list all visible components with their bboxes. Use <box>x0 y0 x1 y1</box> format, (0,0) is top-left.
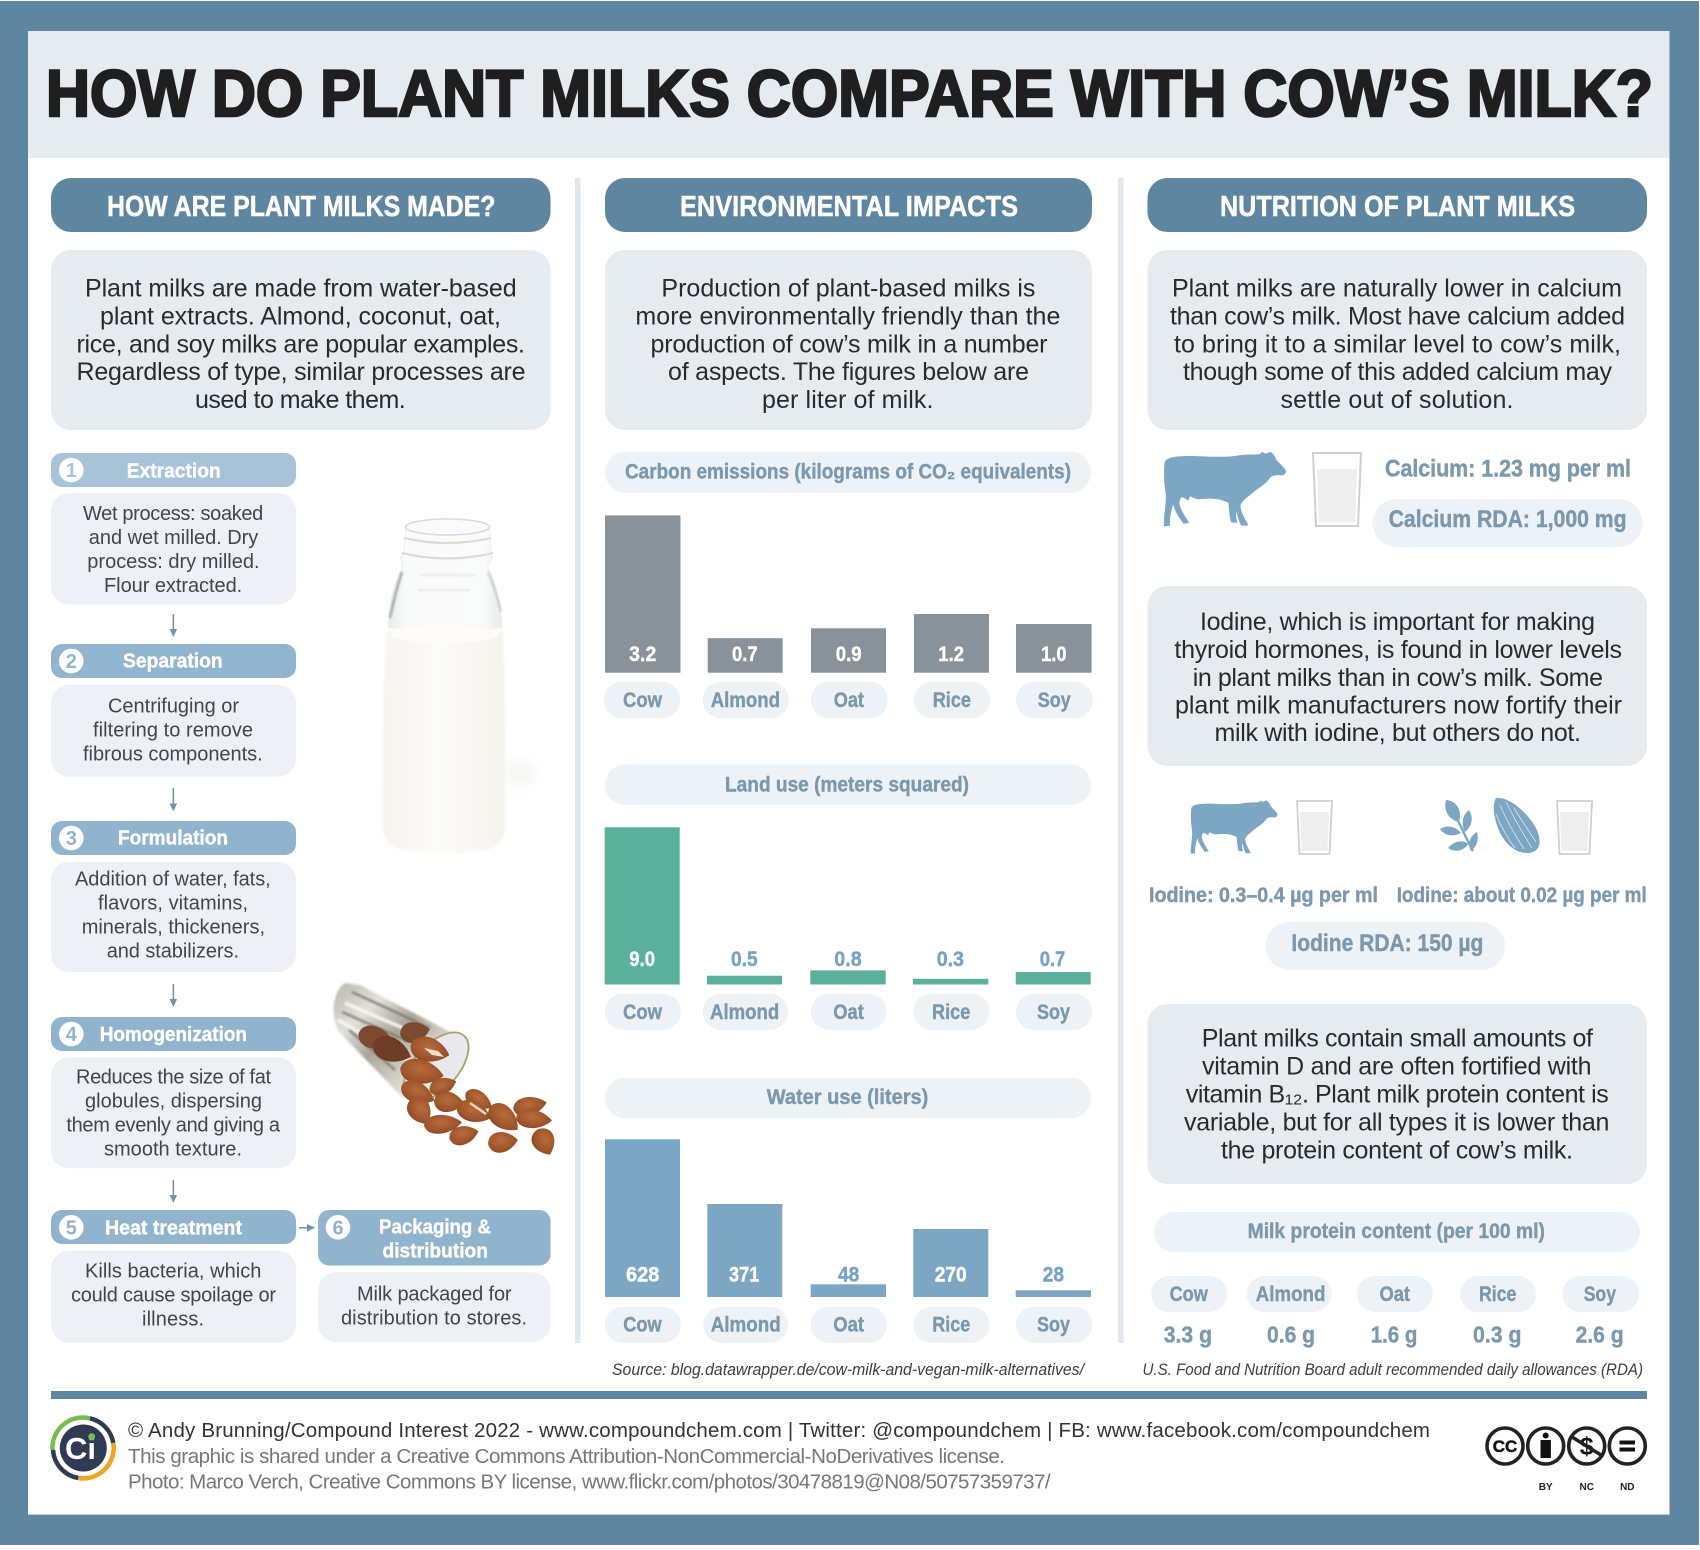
bar chart: land use <box>605 764 1092 1030</box>
text block: vitamins and protein: Plant milks contain small amounts of <box>1202 1025 1593 1053</box>
bar chart: water use: Almond <box>711 1313 781 1336</box>
text block: iodine <box>1148 586 1647 766</box>
bar chart: water use: Oat <box>833 1313 864 1336</box>
icon: creative commons badges <box>1487 1428 1645 1493</box>
text block: environmental intro: more environmentally friendly than the <box>635 302 1060 330</box>
text block: environmental intro: production of cow’s milk in a number <box>650 330 1048 358</box>
heading: how are plant milks made <box>51 178 550 232</box>
step 6: packaging and distribution: distribution <box>382 1239 488 1262</box>
bar chart: water use: 270 <box>935 1263 967 1286</box>
table: milk protein content: Milk protein content (per 100 ml) <box>1248 1220 1545 1243</box>
text block: vitamins and protein: vitamin D and are often fortified with <box>1202 1053 1592 1081</box>
step 3: formulation <box>51 821 296 972</box>
bar chart: water use: Cow <box>623 1313 662 1336</box>
arrow: step 2 to 3 <box>170 788 177 812</box>
table: milk protein content: Oat <box>1380 1283 1410 1306</box>
table: milk protein content: 0.6 g <box>1267 1322 1315 1348</box>
icon: creative commons badges: $ <box>1580 1432 1594 1460</box>
text block: plant milks intro: plant extracts. Almond, coconut, oat, <box>100 302 501 330</box>
heading: nutrition of plant milks <box>1148 178 1647 232</box>
step 2: separation: Separation <box>123 649 223 672</box>
arrow: step 5 to 6 <box>299 1224 315 1232</box>
step 4: homogenization: Homogenization <box>100 1023 247 1046</box>
step 3: formulation: minerals, thickeners, <box>82 917 265 939</box>
bar chart: carbon emissions: Carbon emissions (kilograms of CO₂ equivalents) <box>625 460 1071 484</box>
step 6: packaging and distribution: Packaging & <box>379 1215 491 1238</box>
bar chart: water use: 628 <box>626 1263 660 1286</box>
bar chart: carbon emissions: Rice <box>933 689 971 712</box>
photo: milk bottle <box>382 519 536 854</box>
table: milk protein content: 1.6 g <box>1371 1322 1417 1348</box>
step 1: extraction: Extraction <box>127 460 221 483</box>
bar chart: land use: 0.8 <box>834 948 862 971</box>
step 2: separation: fibrous components. <box>83 744 263 766</box>
calcium RDA pill: Calcium RDA: 1,000 mg <box>1389 506 1627 533</box>
text block: iodine: Iodine, which is important for making <box>1200 608 1595 636</box>
text block: calcium: than cow’s milk. Most have calcium added <box>1170 302 1625 330</box>
bar chart: land use: Oat <box>833 1001 864 1024</box>
step 3: formulation: 3 <box>66 828 77 850</box>
text block: plant milks intro: Plant milks are made from water-based <box>85 274 517 302</box>
logo: compound interest: Ci <box>65 1431 96 1466</box>
icon: creative commons badges: ND <box>1620 1482 1635 1493</box>
step 6: packaging and distribution: 6 <box>332 1217 344 1239</box>
text block: iodine: plant milk manufacturers now fortify their <box>1175 692 1622 720</box>
step 5: heat treatment: Kills bacteria, which <box>85 1260 261 1282</box>
bar chart: land use: Land use (meters squared) <box>725 773 969 796</box>
iodine RDA pill <box>1266 922 1505 970</box>
step 3: formulation: and stabilizers. <box>107 940 239 962</box>
bar chart: carbon emissions: 0.7 <box>732 643 758 666</box>
table: milk protein content: 2.6 g <box>1576 1322 1624 1348</box>
step 3: formulation: Formulation <box>118 826 228 849</box>
text block: plant milks intro: used to make them. <box>195 386 406 414</box>
step 3: formulation: Addition of water, fats, <box>75 869 271 891</box>
bar chart: carbon emissions: 3.2 <box>629 643 656 666</box>
iodine value: cow's milk: Iodine: 0.3–0.4 µg per ml <box>1149 884 1378 907</box>
heading: environmental impacts <box>605 178 1092 232</box>
panel: environmental impacts <box>604 178 1093 1379</box>
bar chart: land use: 0.5 <box>731 948 758 971</box>
step 5: heat treatment: illness. <box>142 1308 204 1330</box>
text block: iodine: thyroid hormones, is found in lower levels <box>1174 636 1622 664</box>
bar chart: carbon emissions <box>604 452 1093 718</box>
table: milk protein content: Soy <box>1584 1283 1616 1306</box>
iodine value: plant milk: Iodine: about 0.02 µg per ml <box>1397 884 1647 907</box>
bar chart: land use: Rice <box>932 1001 970 1024</box>
icon: plant sprig <box>1440 800 1478 851</box>
step 5: heat treatment: 5 <box>66 1217 77 1239</box>
table: milk protein content: Rice <box>1479 1283 1516 1306</box>
text block: calcium: though some of this added calcium may <box>1183 358 1612 386</box>
icon: glass of milk large <box>1313 453 1361 526</box>
arrow: step 4 to 5 <box>170 1180 177 1203</box>
footer credits: © Andy Brunning/Compound Interest 2022 - www.compoundchem.com | Twitter: @compoundchem | FB: www.facebook.com/compoundchem <box>128 1419 1430 1442</box>
icon: creative commons badges: CC <box>1493 1437 1517 1456</box>
bar chart: land use: Soy <box>1037 1001 1070 1024</box>
step 1: extraction: Wet process: soaked <box>83 503 263 525</box>
step 5: heat treatment: could cause spoilage or <box>71 1285 276 1307</box>
title <box>28 31 1670 158</box>
step 1: extraction: Flour extracted. <box>104 575 242 597</box>
text block: vitamins and protein: the protein content of cow’s milk. <box>1221 1137 1573 1165</box>
step 4: homogenization: Reduces the size of fat <box>76 1066 271 1088</box>
step 4: homogenization: them evenly and giving a <box>66 1115 281 1137</box>
text block: vitamins and protein: variable, but for all types it is lower than <box>1184 1109 1609 1137</box>
panel: nutrition of plant milks <box>1142 178 1647 1379</box>
text block: calcium: Plant milks are naturally lower in calcium <box>1172 274 1622 302</box>
text block: iodine: in plant milks than in cow’s milk. Some <box>1193 664 1603 692</box>
photo: glass tube of almonds <box>334 983 560 1159</box>
table: milk protein content <box>1151 1212 1640 1348</box>
text block: vitamins and protein: vitamin B₁₂. Plant milk protein content is <box>1186 1081 1609 1109</box>
arrow: step 3 to 4 <box>170 984 177 1007</box>
calcium RDA pill <box>1373 499 1643 547</box>
bar chart: land use: 0.7 <box>1040 948 1065 971</box>
bar chart: water use: 371 <box>729 1263 760 1286</box>
icon: cow large <box>1164 452 1286 526</box>
icon: almond <box>1494 798 1540 853</box>
text block: vitamins and protein <box>1148 1004 1647 1184</box>
text block: plant milks intro: Regardless of type, similar processes are <box>76 358 526 386</box>
table: milk protein content: 3.3 g <box>1164 1322 1212 1348</box>
step 2: separation <box>51 644 296 777</box>
step 5: heat treatment: Heat treatment <box>105 1217 242 1240</box>
table: milk protein content: 0.3 g <box>1473 1322 1522 1348</box>
step 1: extraction: 1 <box>66 460 77 482</box>
almonds <box>356 1019 560 1159</box>
text block: environmental intro: of aspects. The figures below are <box>668 358 1029 386</box>
text block: plant milks intro: rice, and soy milks are popular examples. <box>76 330 525 358</box>
footer credits: This graphic is shared under a Creative Commons Attribution-NonCommercial-NoDerivatives license. <box>128 1445 1005 1468</box>
bar chart: water use: Rice <box>932 1313 970 1336</box>
step 1: extraction: process: dry milled. <box>87 551 260 573</box>
text block: environmental intro: Production of plant-based milks is <box>661 274 1035 302</box>
text block: environmental intro <box>605 250 1092 430</box>
text block: plant milks intro <box>51 250 550 430</box>
column dividers <box>575 178 1124 1343</box>
step 3: formulation: flavors, vitamins, <box>98 893 248 915</box>
step 4: homogenization <box>51 1017 296 1168</box>
footer credits: Photo: Marco Verch, Creative Commons BY license, www.flickr.com/photos/30478819@N08/50757359737/ <box>128 1470 1051 1494</box>
step 1: extraction <box>51 453 296 604</box>
step 1: extraction: and wet milled. Dry <box>89 527 258 549</box>
bar chart: carbon emissions: Soy <box>1038 689 1071 712</box>
step 2: separation: 2 <box>66 651 77 673</box>
bar chart: land use: 0.3 <box>937 948 964 971</box>
source note: RDA: U.S. Food and Nutrition Board adult recommended daily allowances (RDA) <box>1142 1361 1643 1379</box>
icon: creative commons badges: NC <box>1579 1482 1594 1493</box>
table: milk protein content: Cow <box>1170 1283 1208 1306</box>
text block: calcium: to bring it to a similar level to cow’s milk, <box>1174 330 1621 358</box>
bar chart: water use <box>605 1078 1092 1343</box>
icon: glass of milk small plant <box>1557 801 1592 854</box>
bar chart: land use: Almond <box>710 1001 779 1024</box>
bar chart: carbon emissions: Almond <box>711 689 780 712</box>
step 4: homogenization: 4 <box>66 1024 78 1046</box>
logo: compound interest <box>52 1417 114 1478</box>
bar chart: water use: 28 <box>1043 1263 1064 1286</box>
bar chart: land use: 9.0 <box>629 948 655 971</box>
bar chart: carbon emissions: 0.9 <box>836 643 862 666</box>
iodine RDA pill: Iodine RDA: 150 µg <box>1291 930 1483 957</box>
heading: nutrition of plant milks: NUTRITION OF PLANT MILKS <box>1220 191 1575 223</box>
table: milk protein content: Almond <box>1256 1283 1325 1306</box>
bar chart: carbon emissions: Cow <box>623 689 663 712</box>
bar chart: carbon emissions: 1.2 <box>938 643 964 666</box>
calcium value: Calcium: 1.23 mg per ml <box>1385 456 1631 483</box>
step 6: packaging and distribution <box>318 1210 550 1342</box>
heading: environmental impacts: ENVIRONMENTAL IMPACTS <box>680 191 1018 223</box>
icon: cow small <box>1191 801 1278 854</box>
step 4: homogenization: smooth texture. <box>104 1139 242 1161</box>
footer rule <box>51 1391 1647 1399</box>
step 2: separation: Centrifuging or <box>108 696 239 718</box>
bar chart: water use: 48 <box>838 1263 860 1286</box>
arrow: step 1 to 2 <box>170 614 177 637</box>
text block: calcium: settle out of solution. <box>1280 386 1514 414</box>
bar chart: water use: Soy <box>1037 1313 1070 1336</box>
icon: glass of milk small <box>1297 801 1332 854</box>
bar chart: carbon emissions: Oat <box>834 689 864 712</box>
bar chart: land use: Cow <box>623 1001 663 1024</box>
step 4: homogenization: globules, dispersing <box>85 1091 262 1113</box>
text block: iodine: milk with iodine, but others do not. <box>1214 719 1581 747</box>
text block: calcium <box>1148 250 1647 430</box>
step 2: separation: filtering to remove <box>93 720 253 742</box>
step 5: heat treatment <box>51 1210 296 1343</box>
panel: how are plant milks made <box>51 178 560 1343</box>
text block: environmental intro: per liter of milk. <box>762 386 934 414</box>
step 6: packaging and distribution: Milk packaged for <box>357 1283 512 1305</box>
icon: creative commons badges: BY <box>1539 1482 1553 1493</box>
source note: datawrapper: Source: blog.datawrapper.de/cow-milk-and-vegan-milk-alternatives/ <box>612 1361 1085 1379</box>
heading: how are plant milks made: HOW ARE PLANT MILKS MADE? <box>107 191 496 223</box>
bar chart: carbon emissions: 1.0 <box>1041 643 1067 666</box>
footer credits <box>128 1419 1430 1494</box>
step 6: packaging and distribution: distribution to stores. <box>341 1307 527 1329</box>
bar chart: water use: Water use (liters) <box>767 1086 928 1109</box>
